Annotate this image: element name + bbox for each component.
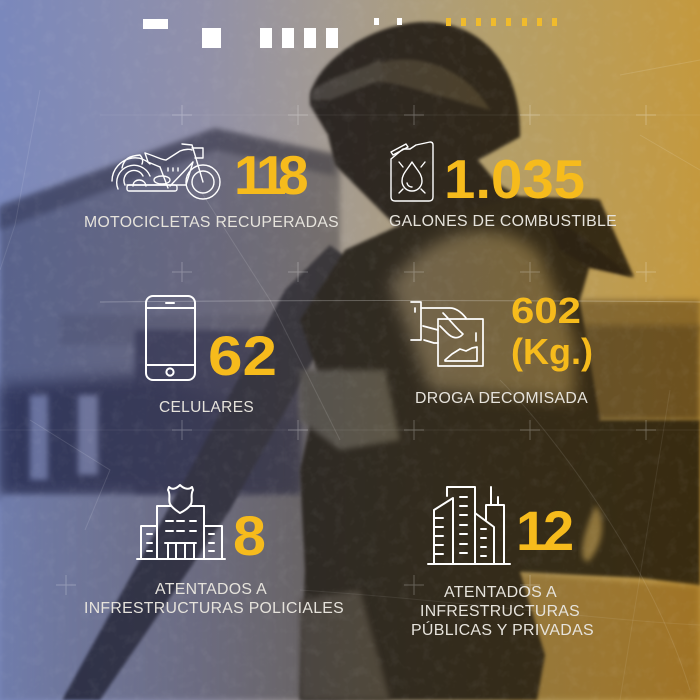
label: atentados a infrestructuras policiales: ATENTADOS A bbox=[155, 581, 267, 598]
icon: motorcycle bbox=[112, 144, 220, 199]
stat: attacks on police infrastructure bbox=[84, 485, 344, 617]
stat: motorcycles bbox=[84, 144, 339, 231]
value: 602 (Kg.) bbox=[511, 290, 593, 372]
icon: skyscrapers bbox=[428, 487, 510, 564]
label: atentados a infrestructuras policiales bbox=[84, 581, 344, 617]
background: rifle bbox=[62, 245, 352, 700]
value: 62: 62 bbox=[208, 324, 277, 387]
top decorative marks bbox=[143, 18, 557, 48]
value: 8: 8 bbox=[233, 504, 266, 567]
icon: jerry can bbox=[391, 142, 433, 201]
icon: police building bbox=[137, 485, 225, 559]
label: galones de combustible: GALONES DE COMBUSTIBLE bbox=[389, 213, 617, 230]
label: atentados a infrestructuras publicas y privadas: PÚBLICAS Y PRIVADAS bbox=[411, 622, 594, 639]
background: vehicle on right bbox=[505, 300, 700, 700]
background: ground bbox=[0, 495, 340, 700]
icon: hand holding evidence bag bbox=[411, 302, 483, 366]
label: motocicletas recuperadas: MOTOCICLETAS RECUPERADAS bbox=[84, 214, 339, 231]
label: atentados a infrestructuras publicas y privadas bbox=[411, 584, 594, 639]
label: droga decomisada: DROGA DECOMISADA bbox=[415, 390, 588, 407]
stat: phones bbox=[146, 296, 277, 416]
value: 12: 12 bbox=[516, 499, 574, 562]
label: celulares: CELULARES bbox=[159, 399, 254, 416]
value: 602 (Kg.): 602 bbox=[511, 290, 581, 331]
stat: attacks on public and private infrastructure bbox=[411, 487, 594, 639]
value: 118: 118 bbox=[234, 144, 309, 206]
soldier torso bbox=[300, 197, 634, 700]
label: atentados a infrestructuras publicas y privadas: ATENTADOS A bbox=[444, 584, 557, 601]
stat: fuel bbox=[389, 142, 617, 230]
soldier helmet and head bbox=[310, 22, 600, 240]
value: 1.035: 1.035 bbox=[444, 148, 585, 210]
label: atentados a infrestructuras policiales: INFRESTRUCTURAS POLICIALES bbox=[84, 600, 344, 617]
label: atentados a infrestructuras publicas y privadas: INFRESTRUCTURAS bbox=[420, 603, 580, 620]
stat: drugs bbox=[411, 290, 593, 407]
icon: smartphone bbox=[146, 296, 195, 380]
background: building bbox=[0, 128, 340, 500]
value: 602 (Kg.): (Kg.) bbox=[511, 331, 593, 372]
